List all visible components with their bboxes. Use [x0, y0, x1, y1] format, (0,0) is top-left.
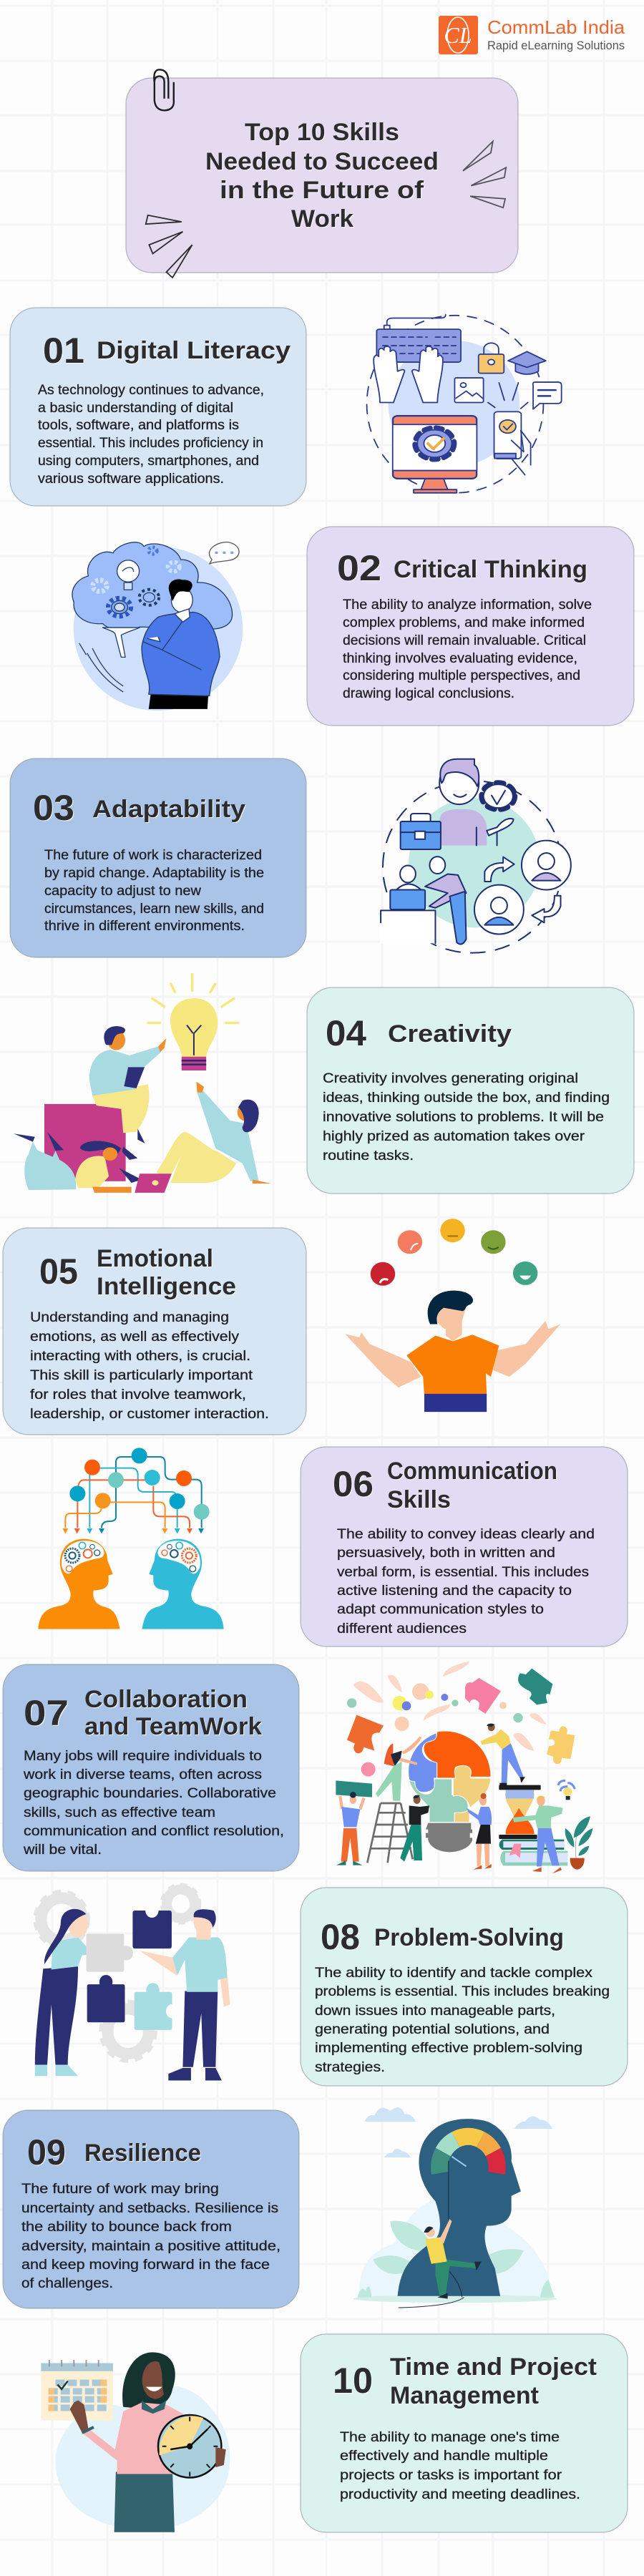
person holding board [336, 1780, 372, 1865]
user circles [474, 841, 571, 934]
body text: circumstances, learn new skills, and [44, 902, 264, 917]
icon: paperclip [154, 69, 174, 110]
leaves [357, 2221, 555, 2298]
body text: skills, such as effective team [24, 1805, 215, 1820]
logo: CommLab India: CL [444, 22, 472, 48]
man [140, 1909, 230, 2081]
body text: The future of work may bring [21, 2182, 219, 2197]
body text: using computers, smartphones, and [38, 454, 259, 469]
speech bubble [209, 542, 239, 564]
graduation cap [508, 351, 546, 374]
title text: Top 10 Skills [245, 119, 399, 146]
body text [343, 597, 592, 701]
body text: of challenges. [21, 2276, 113, 2291]
body text: strategies. [315, 2060, 385, 2075]
seated man [89, 1026, 166, 1160]
panel: 01 Digital Literacy [10, 308, 306, 506]
body text: This skill is particularly important [30, 1368, 253, 1383]
body text: The ability to manage one's time [340, 2430, 560, 2445]
body text: emotions, as well as effectively [30, 1330, 240, 1345]
body text: geographic boundaries. Collaborative [24, 1786, 276, 1801]
man with small bulb [513, 1780, 575, 1873]
panel: 03 Adaptability [10, 758, 306, 957]
trousers [424, 1394, 487, 1412]
people at desk [380, 857, 466, 945]
monitor with gear [393, 416, 477, 493]
backdrop blob [55, 2386, 230, 2530]
pale backdrop [359, 2198, 551, 2298]
body text: tools, software, and platforms is [38, 418, 239, 433]
body text: The future of work is characterized [44, 848, 262, 863]
woman in blue top [467, 1793, 492, 1870]
magenta box [44, 1104, 126, 1181]
body text: considering multiple perspectives, and [343, 668, 580, 683]
heading: Management [390, 2382, 539, 2409]
body text: essential. This includes proficiency in [38, 436, 263, 451]
man in black sweater [400, 1795, 429, 1862]
light bulb [147, 973, 239, 1070]
body text: projects or tasks is important for [340, 2468, 562, 2483]
heading [390, 2353, 597, 2409]
heading: Adaptability [92, 796, 245, 823]
body text: down issues into manageable parts, [315, 2004, 555, 2019]
panel: 09 Resilience [3, 2110, 299, 2308]
body text: adapt communication styles to [337, 1602, 544, 1617]
body text [23, 1749, 284, 1858]
body text: ideas, thinking outside the box, and finding [323, 1091, 610, 1106]
ground [353, 2295, 557, 2303]
heading: and TeamWork [84, 1713, 262, 1740]
heading: Critical Thinking [394, 556, 587, 583]
number 07: 07 [24, 1693, 69, 1733]
blue head [142, 1539, 224, 1629]
number 09: 09 [27, 2132, 66, 2172]
nodes [69, 1448, 210, 1520]
body text: verbal form, is essential. This includes [337, 1565, 589, 1580]
number 01: 01 [43, 331, 84, 371]
body text [315, 1966, 610, 2075]
body text [38, 383, 264, 487]
title text: Work [291, 205, 353, 233]
illustration: man thinking with brain [72, 542, 243, 711]
number 02: 02 [337, 548, 381, 588]
number 05: 05 [39, 1252, 78, 1292]
illustration: digital devices [367, 315, 562, 493]
number 04: 04 [326, 1013, 366, 1053]
body text: the ability to bounce back from [21, 2220, 232, 2235]
stack of books [499, 1840, 567, 1865]
body text [21, 2182, 280, 2291]
climber and rope [399, 2161, 482, 2308]
man [79, 579, 220, 709]
clock [158, 2415, 226, 2477]
body text: decisions will remain invaluable. Critical [343, 633, 586, 648]
illustration: woman with calendar and clock [41, 2352, 230, 2532]
panel: 08 Problem-Solving [301, 1888, 628, 2086]
woman [70, 2352, 201, 2532]
body text: The ability to convey ideas clearly and [337, 1527, 595, 1542]
body text: implementing effective problem-solving [315, 2041, 582, 2056]
body text [30, 1310, 269, 1422]
body text: effectively and handle multiple [340, 2449, 548, 2464]
background gears [36, 1885, 199, 2060]
gear with check [482, 783, 514, 809]
body text: and keep moving forward in the face [21, 2258, 270, 2273]
gears [93, 547, 180, 616]
illustration: man juggling emotions [345, 1219, 561, 1412]
heading: Resilience [84, 2140, 201, 2167]
body text: thrive in different environments. [44, 919, 245, 934]
body text: adversity, maintain a positive attitude, [21, 2239, 280, 2254]
decorative rays: title left [146, 215, 192, 278]
body text [340, 2430, 580, 2502]
head and neck [437, 1308, 466, 1341]
puzzle pieces [347, 1669, 575, 1764]
number 08: 08 [321, 1917, 360, 1957]
number 03: 03 [33, 788, 74, 828]
panel: 02 Critical Thinking [307, 527, 634, 726]
illustration: team building puzzle bulb [336, 1662, 592, 1873]
body text: work in diverse teams, often across [23, 1767, 262, 1782]
logo: CommLab India: Rapid eLearning Solutions [487, 39, 625, 52]
title text [205, 119, 439, 233]
jigsaw light bulb [409, 1731, 491, 1852]
body text: productivity and meeting deadlines. [340, 2487, 580, 2502]
illustration: team solving puzzle [35, 1885, 230, 2081]
illustration: adaptable people [380, 759, 571, 953]
body text: communication and conflict resolution, [24, 1824, 284, 1839]
hourglass [499, 1785, 541, 1839]
body text: persuasively, both in written and [337, 1546, 555, 1561]
padlock [479, 343, 504, 374]
body text: generating potential solutions, and [315, 2022, 550, 2037]
connection lines [65, 1457, 202, 1528]
light bulb [117, 560, 140, 590]
heading: Digital Literacy [97, 337, 291, 364]
title text: in the Future of [220, 177, 424, 204]
reclining woman [156, 1082, 271, 1184]
arrowheads [62, 1528, 204, 1533]
manager figure [439, 759, 497, 845]
body text: Creativity involves generating original [323, 1071, 578, 1086]
body text: As technology continues to advance, [38, 383, 264, 398]
body text: leadership, or customer interaction. [30, 1407, 269, 1422]
heading [387, 1458, 557, 1513]
panel: 06 Communication Skills [301, 1447, 628, 1646]
chat bubble [533, 382, 562, 409]
body text: problems is essential. This includes breaking [315, 1984, 610, 1999]
arms [345, 1321, 561, 1387]
panel: title [126, 78, 518, 273]
woman [35, 1909, 99, 2076]
heading: Time and Project [390, 2353, 597, 2381]
body text: Many jobs will require individuals to [24, 1749, 262, 1764]
panel: 05 Emotional Intelligence [3, 1228, 306, 1435]
body text: for roles that involve teamwork, [30, 1387, 246, 1402]
panel: 07 Collaboration and Teamwork [3, 1664, 299, 1871]
body text [323, 1071, 610, 1163]
ladder [367, 1803, 413, 1863]
shirt [406, 1335, 499, 1395]
lying woman with laptop [14, 1132, 172, 1193]
heading: Intelligence [97, 1273, 236, 1300]
logo: CommLab India: CommLab India [487, 16, 625, 38]
smartphone [494, 411, 531, 475]
body text: will be vital. [23, 1843, 102, 1858]
heading [97, 1245, 236, 1300]
picture icon [454, 378, 484, 403]
heading: Problem-Solving [374, 1924, 564, 1951]
body text: routine tasks. [323, 1148, 414, 1163]
heading: Communication [387, 1458, 557, 1485]
heading: Skills [387, 1486, 451, 1513]
head silhouette [398, 2119, 521, 2296]
floating shapes [347, 1662, 547, 1777]
body text: highly prized as automation takes over [323, 1129, 585, 1144]
logo: CommLab India [439, 16, 625, 54]
brain cloud [72, 542, 233, 630]
heading: Emotional [97, 1245, 213, 1272]
body text: complex problems, and make informed [343, 615, 585, 630]
body text: interacting with others, is crucial. [30, 1349, 250, 1364]
illustration: team around light bulb [14, 973, 271, 1193]
body text: various software applications. [38, 472, 224, 487]
man on hourglass [481, 1724, 525, 1787]
body text: uncertainty and setbacks. Resilience is [21, 2201, 278, 2216]
decorative rays: title right [463, 141, 506, 208]
body text: thinking involves evaluating evidence, [343, 651, 577, 666]
panel: 10 Time and Project Management [301, 2334, 628, 2532]
illustration: communicating heads [38, 1448, 224, 1629]
body text: The ability to identify and tackle complex [315, 1966, 593, 1981]
heading: Collaboration [84, 1686, 248, 1713]
body text: by rapid change. Adaptability is the [44, 866, 264, 881]
body text: Understanding and managing [30, 1310, 229, 1325]
gauge [439, 2137, 497, 2173]
body text: a basic understanding of digital [38, 401, 233, 416]
orange head [38, 1539, 120, 1629]
body text: active listening and the capacity to [337, 1584, 572, 1599]
number 06: 06 [333, 1464, 374, 1504]
hands on keyboard [374, 346, 443, 403]
illustration: climber on head silhouette [353, 2107, 557, 2308]
emoji faces [371, 1219, 537, 1286]
clouds [365, 2107, 552, 2157]
hair [428, 1291, 473, 1324]
title text: Needed to Succeed [205, 148, 439, 175]
cycle arrows [484, 857, 561, 922]
body text: capacity to adjust to new [44, 884, 201, 899]
keyboard [376, 315, 461, 362]
calendar [41, 2360, 113, 2420]
body text: drawing logical conclusions. [343, 686, 514, 701]
body text: The ability to analyze information, solve [343, 597, 592, 613]
woman on ladder [376, 1737, 421, 1801]
puzzle pieces [87, 1903, 179, 2030]
body text [44, 848, 264, 934]
body text: innovative solutions to problems. It will be [323, 1110, 604, 1125]
body text: different audiences [337, 1621, 467, 1636]
heading: Creativity [388, 1020, 512, 1048]
body text [337, 1527, 595, 1636]
panel: 04 Creativity [307, 987, 634, 1194]
heading [84, 1686, 262, 1740]
briefcase [401, 814, 441, 849]
potted plant [565, 1816, 592, 1870]
number 10: 10 [333, 2361, 373, 2401]
